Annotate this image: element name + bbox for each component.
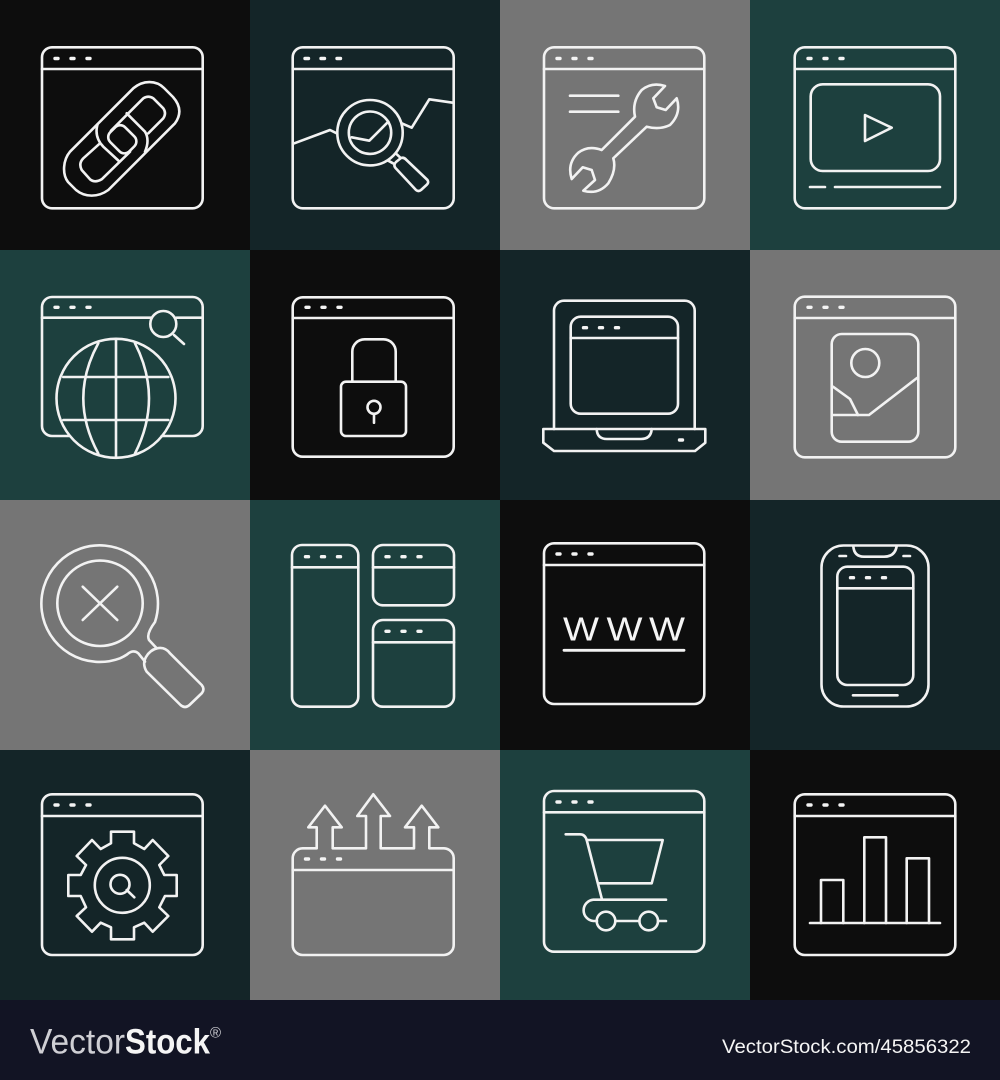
panel: bar chart — [750, 750, 1000, 1000]
icon: wrench window — [544, 47, 704, 208]
footer bar — [0, 1000, 1000, 1080]
logo: VectorStock: ® — [210, 1024, 221, 1042]
logo: VectorStock: Stock — [125, 1022, 210, 1061]
panel: shopping cart — [500, 750, 750, 1000]
icon: laptop with window — [543, 301, 705, 451]
panel: www — [500, 500, 750, 750]
icon: picture window — [795, 297, 955, 457]
text: www: W — [563, 611, 600, 648]
panel: analytics search — [250, 0, 500, 250]
icon: magnifier over chart window — [293, 47, 454, 208]
icon: gear window — [42, 794, 203, 955]
text: www: W — [606, 611, 643, 648]
icon: chain link window — [42, 47, 203, 208]
icon: bar chart window — [795, 794, 955, 955]
icon: www window — [544, 543, 704, 704]
logo: VectorStock: Vector — [30, 1022, 125, 1061]
panel: search error — [0, 500, 250, 750]
icon: padlock window — [293, 297, 454, 457]
panel: mobile phone — [750, 500, 1000, 750]
panel: image gallery — [750, 250, 1000, 500]
icon: cart window — [544, 791, 704, 952]
panel: upload arrows — [250, 750, 500, 1000]
panel: search settings — [0, 750, 250, 1000]
icon: globe window — [42, 297, 203, 458]
panel: link in browser — [0, 0, 250, 250]
icon: window with three arrows — [293, 794, 454, 955]
panel: window layout — [250, 500, 500, 750]
text: www: W — [649, 611, 686, 648]
panel: security lock — [250, 250, 500, 500]
panel: globe search — [0, 250, 250, 500]
icon: video window — [795, 47, 955, 208]
icon: magnifier with cross — [41, 545, 203, 707]
panel: video player — [750, 0, 1000, 250]
logo: VectorStock — [30, 1022, 221, 1061]
panel: laptop — [500, 250, 750, 500]
icon: phone with window — [822, 546, 928, 706]
panel: wrench settings — [500, 0, 750, 250]
icon: three window layout — [292, 545, 454, 707]
text: www — [563, 611, 686, 648]
image id text: VectorStock.com/45856322 — [722, 1037, 971, 1058]
